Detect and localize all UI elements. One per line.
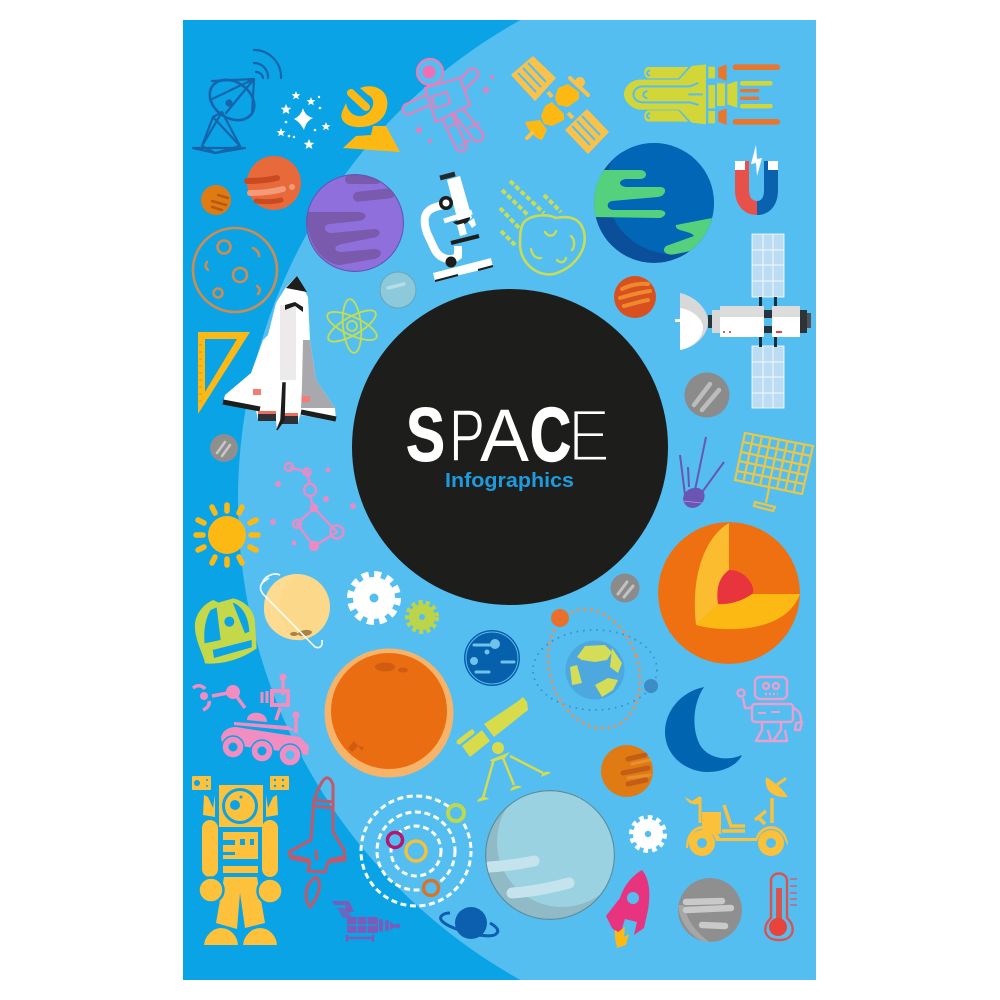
icon: asteroid [500,181,585,274]
planet: grey small centre [610,574,640,602]
icon: microscope [425,174,493,281]
icon: green gear [408,602,436,632]
title: SPACE: E [568,394,610,477]
title: SPACE: A [480,394,530,477]
planet: small orange top right [614,276,656,318]
planet: large orange [324,648,454,778]
icon: radio telescope outline [193,50,281,153]
icon: green observatory [195,598,257,664]
planet: orange lower [601,745,653,797]
icon: white gear small [632,818,664,850]
icon: triangle ruler [198,332,250,414]
planet: small orange left [201,185,231,215]
icon: crescent moon [665,687,742,772]
icon: lunar rover [685,777,788,856]
planet: pale yellow ringed [260,574,330,648]
planet: blue and green [594,143,714,263]
infographic cover [183,20,816,980]
planet: purple [306,174,404,272]
icon: white stars [277,91,330,149]
icon: thermometer [765,874,797,940]
icon: yellow telescope [459,697,551,802]
icon: moon outline [193,228,277,312]
icon: space station [675,234,811,408]
icon: outline shuttle [289,778,345,907]
diagram: orbit rings [361,796,471,906]
title: SPACE: P [449,394,485,477]
icon: pink moon rover [193,674,309,766]
planet: small blue [464,630,520,686]
icon: sputnik [680,437,724,508]
icon: blue ringed planet [441,907,498,939]
icon: constellation [270,463,356,550]
icon: solar panel [735,433,813,511]
icon: white gear large [350,574,398,622]
title: SPACE: C [530,393,571,478]
planet: small grey left [210,434,238,462]
subtitle: Infographics: Infographics [445,470,574,492]
title: SPACE: S [406,393,445,478]
icon: atom [324,298,380,354]
planet: grey lower [678,878,742,944]
icon: pink rocket [606,870,649,948]
planet: large pale blue [485,790,615,920]
diagram: earth with orbits [533,597,658,741]
title: SPACE [406,393,610,478]
planet: grey upper [684,372,730,418]
icon: pink robot outline [738,677,802,741]
icon: yellow astronaut robot [192,776,289,946]
icon: yellow satellite [512,57,608,153]
icon: rocket burner [624,64,780,125]
title circle [352,289,668,605]
planet: cutaway core [658,522,800,664]
icon: sun [196,505,258,565]
background panel [183,20,816,980]
icon: yellow satellite dish [341,86,400,152]
planet: bubble [380,272,416,308]
planet: red orange [247,156,301,210]
icon: pink astronaut outline [408,59,494,146]
icon: space shuttle [223,276,336,430]
icon: purple telescope [331,901,400,942]
icon: magnet [735,145,778,215]
